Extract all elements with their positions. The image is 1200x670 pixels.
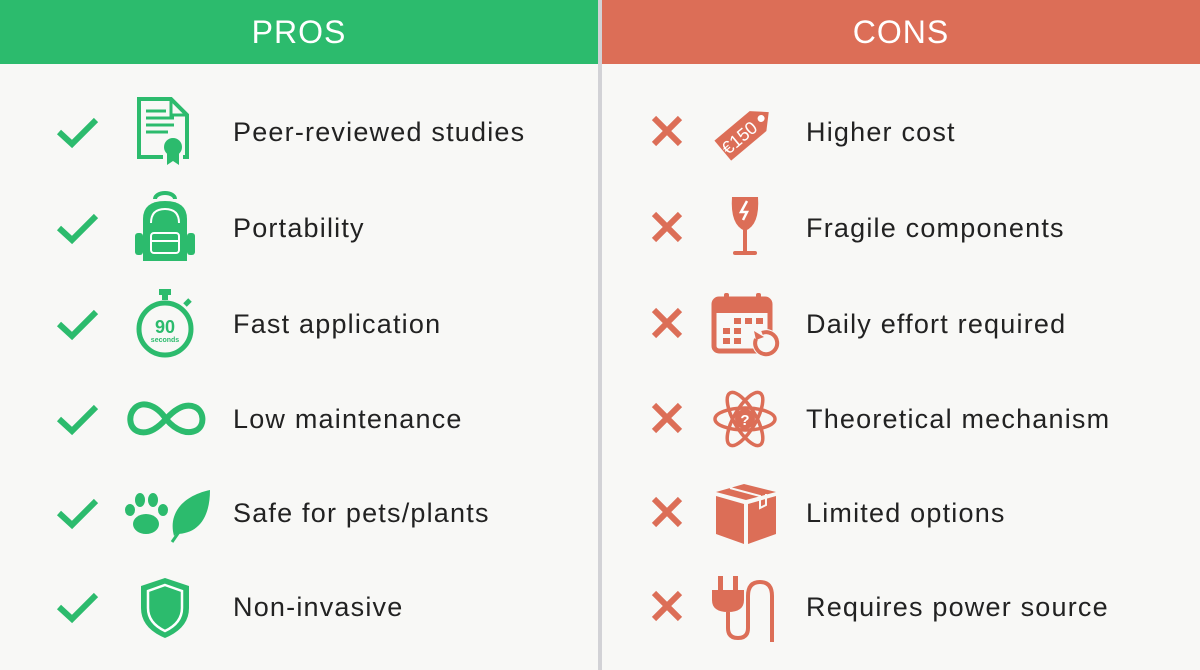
row: fast application: seconds [151,337,179,344]
row: daily effort [652,293,1066,356]
row: theoretical mechanism [652,390,1110,448]
panel: cons [652,111,1110,642]
row: daily effort: Daily effort required [806,309,1066,339]
row: higher cost: Higher cost [806,117,956,147]
row: fragile: Fragile components [806,213,1065,243]
row: safe for pets/plants [57,490,490,543]
row: higher cost [652,111,956,161]
row: low maintenance [57,401,463,436]
row: safe for pets/plants: Safe for pets/plants [233,498,490,528]
row: fast application: 90 [155,317,175,337]
row: peer-reviewed [57,97,525,165]
header: pros [0,0,598,64]
row: portability: Portability [233,213,365,243]
header: cons [602,0,1200,64]
row: non-invasive: Non-invasive [233,592,403,622]
row: portability [57,191,365,261]
row: limited options [652,484,1006,544]
row: theoretical mechanism: Theoretical mechanism [806,404,1110,434]
row: low maintenance: Low maintenance [233,404,463,434]
row: power source: Requires power source [806,592,1109,622]
header: pros: PROS [252,14,346,50]
row: fast application: Fast application [233,309,441,339]
row: peer-reviewed: Peer-reviewed studies [233,117,525,147]
row: higher cost: €150 [718,117,761,158]
row: power source [652,576,1109,642]
panel: pros [57,97,525,638]
header: cons: CONS [853,14,949,50]
row: non-invasive [57,578,403,638]
row: fast application [57,289,441,358]
row: fragile [652,197,1065,255]
row: limited options: Limited options [806,498,1006,528]
row: theoretical mechanism: ? [740,412,750,429]
